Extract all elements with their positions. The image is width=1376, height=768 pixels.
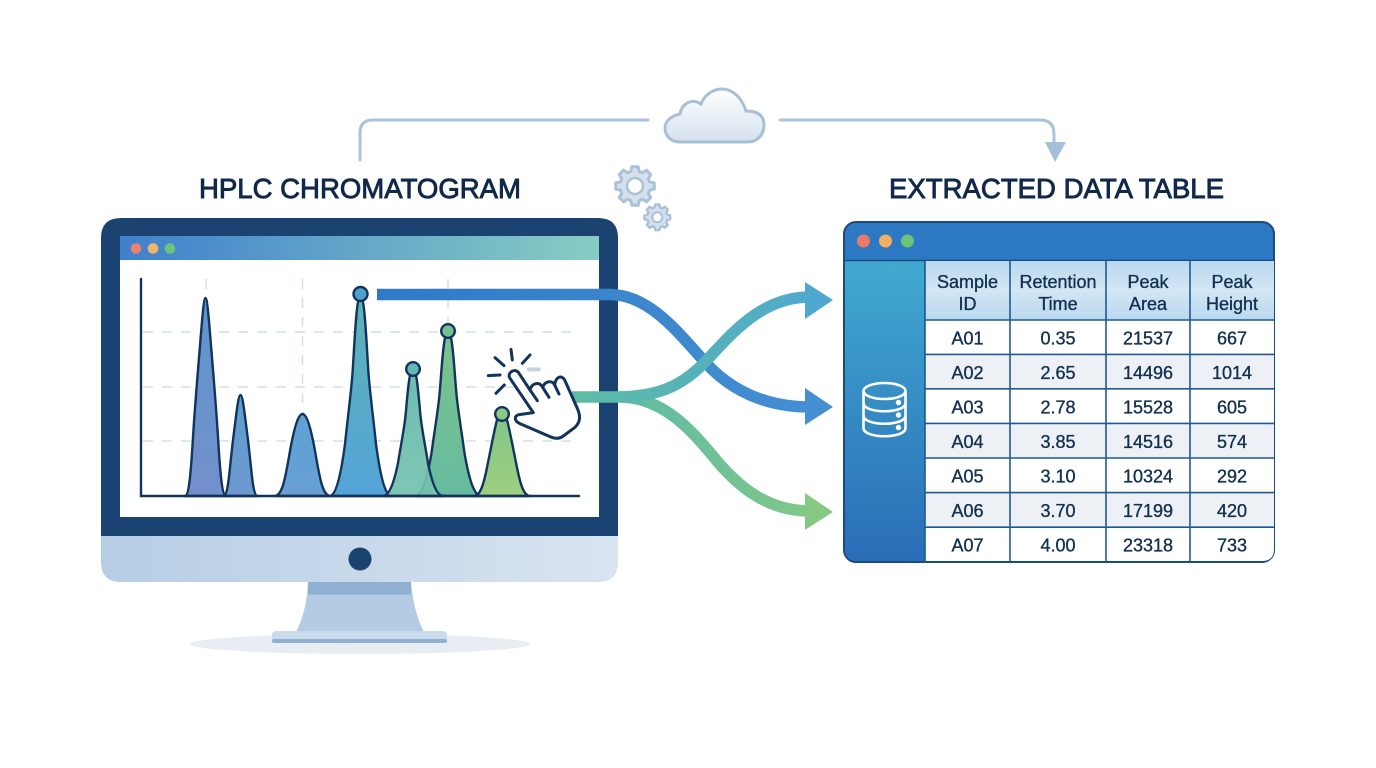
table rows: A06 — [951, 501, 984, 521]
table rows: 667 — [1217, 328, 1247, 348]
arrow: teal ribbon — [572, 282, 833, 397]
heading: HPLC chromatogram: HPLC CHROMATOGRAM — [199, 173, 521, 204]
connector: chromatogram to cloud — [360, 120, 648, 160]
table header: ID — [958, 294, 977, 314]
table rows: 2.65 — [1040, 363, 1076, 383]
table header: Retention — [1019, 272, 1097, 292]
table rows: 21537 — [1123, 328, 1173, 348]
sidebar — [845, 261, 924, 561]
table header: Peak — [1127, 272, 1170, 292]
table rows: 292 — [1217, 466, 1247, 486]
peak 2 — [224, 395, 258, 496]
table rows: 15528 — [1123, 398, 1173, 418]
window control dots — [857, 234, 914, 248]
axes — [141, 279, 579, 496]
table rows: A02 — [951, 363, 984, 383]
icon: database — [864, 383, 906, 436]
table rows: 3.85 — [1040, 432, 1076, 452]
peak 3 — [274, 414, 330, 496]
table rows: 574 — [1217, 432, 1247, 452]
table header: Sample — [937, 272, 998, 292]
table rows: A05 — [951, 466, 984, 486]
table rows: 1014 — [1212, 363, 1252, 383]
table rows: A07 — [951, 536, 984, 556]
monitor body — [101, 218, 618, 582]
table header: Peak — [1211, 272, 1254, 292]
table rows — [951, 328, 1252, 556]
table rows: 733 — [1217, 536, 1247, 556]
table rows: 14496 — [1123, 363, 1173, 383]
chromatogram chart — [141, 279, 579, 496]
connector: cloud to data table — [780, 120, 1066, 162]
monitor power button — [348, 548, 372, 570]
peak markers — [354, 287, 509, 421]
table rows: 420 — [1217, 501, 1247, 521]
table rows: 23318 — [1123, 536, 1173, 556]
peak 1 — [185, 298, 226, 496]
table rows: 17199 — [1123, 501, 1173, 521]
table rows: 4.00 — [1040, 536, 1076, 556]
table rows: A03 — [951, 398, 984, 418]
table header: Area — [1129, 294, 1168, 314]
table rows: 3.70 — [1040, 501, 1076, 521]
table rows: 10324 — [1123, 466, 1173, 486]
table header: Time — [1038, 294, 1078, 314]
table rows: A04 — [951, 432, 984, 452]
table rows: 2.78 — [1040, 398, 1076, 418]
panel: data table window — [844, 222, 1274, 562]
icon: cloud — [665, 89, 764, 142]
peak 6 — [415, 331, 481, 496]
heading: extracted data table: EXTRACTED DATA TABLE — [889, 173, 1224, 204]
monitor stand — [190, 582, 530, 654]
table rows: 14516 — [1123, 432, 1173, 452]
arrow: blue ribbon — [377, 294, 833, 425]
table rows: 3.10 — [1040, 466, 1076, 486]
screen title bar — [120, 236, 599, 260]
table header — [937, 272, 1258, 314]
icon: gears — [616, 167, 670, 230]
arrow: green ribbon — [620, 397, 833, 530]
data table — [925, 261, 1274, 562]
peak 7 — [474, 414, 530, 496]
icon: pointing hand cursor — [488, 349, 580, 438]
peak 5 — [383, 369, 443, 496]
table rows: 0.35 — [1040, 328, 1076, 348]
table rows: 605 — [1217, 398, 1247, 418]
table header: Height — [1206, 294, 1258, 314]
table rows: A01 — [951, 328, 984, 348]
peak 4 — [330, 296, 392, 496]
